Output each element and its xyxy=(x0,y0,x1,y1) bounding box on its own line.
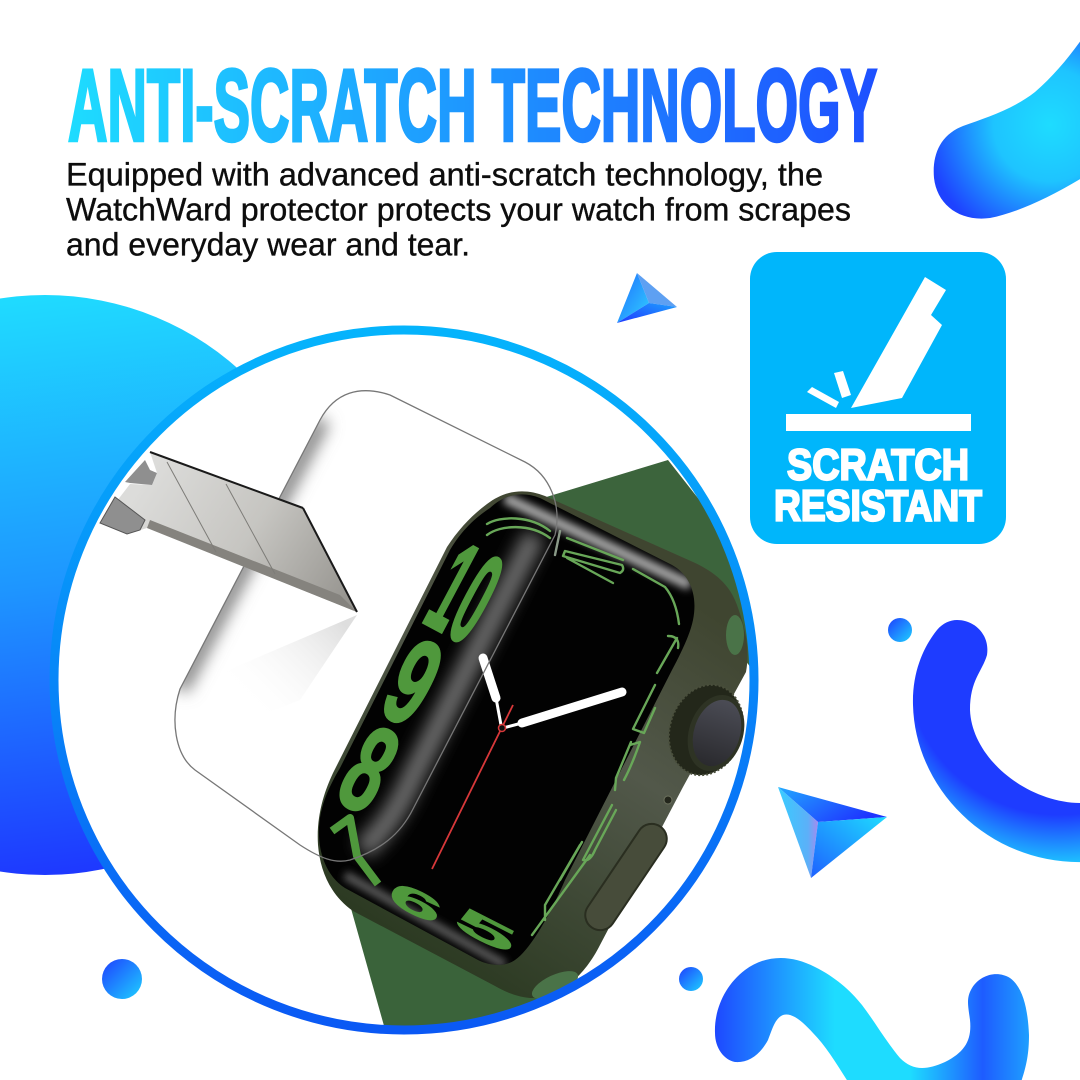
side button xyxy=(584,822,668,931)
badge label xyxy=(774,440,982,530)
strap lug highlights xyxy=(528,615,744,1005)
blade xyxy=(100,452,357,612)
dot bottom middle xyxy=(679,967,703,991)
dial thin markers xyxy=(487,518,679,935)
microphone hole xyxy=(664,796,672,804)
dial numerals 7 6 5: 6 xyxy=(382,873,449,933)
icon: spark marks xyxy=(807,371,851,408)
description text: WatchWard protector protects your watch from scrapes xyxy=(66,192,851,228)
description text: and everyday wear and tear. xyxy=(66,226,470,262)
badge label: RESISTANT xyxy=(774,482,982,530)
badge label: SCRATCH xyxy=(787,440,969,490)
icon: knife blade xyxy=(851,277,946,408)
dial numerals bold xyxy=(340,545,502,812)
screen reflections xyxy=(345,498,690,965)
watch screen xyxy=(319,494,694,965)
blade edges and score lines xyxy=(150,452,357,612)
bottom S-shaped blob xyxy=(715,958,1029,1080)
watch case xyxy=(318,491,748,998)
crown xyxy=(669,684,744,776)
description text xyxy=(66,156,851,262)
utility knife xyxy=(100,452,357,612)
dial numerals bold: 10 xyxy=(406,516,522,672)
large pyramid arrow xyxy=(778,787,887,878)
dial numerals 7 6 5 xyxy=(332,818,523,962)
white disc with product photo xyxy=(58,374,750,1026)
transparent screen protector film xyxy=(175,391,557,861)
left gradient circle xyxy=(0,295,335,875)
dot top right xyxy=(888,618,912,642)
watch strap bottom xyxy=(351,910,538,1026)
watch hands xyxy=(432,658,622,869)
description text: Equipped with advanced anti-scratch technology, the xyxy=(66,156,823,192)
scratch resistant badge xyxy=(750,252,1006,544)
dot bottom left xyxy=(102,959,142,999)
watch strap top xyxy=(546,460,750,666)
knife handle parts xyxy=(100,460,157,534)
blade lower bevel xyxy=(147,520,357,612)
dial numerals bold: 8 xyxy=(319,700,418,840)
icon: scratched surface bar xyxy=(786,414,971,431)
small pyramid arrow xyxy=(617,273,677,323)
top-right blob xyxy=(934,20,1080,219)
dial numerals bold: 9 xyxy=(363,613,462,753)
film reflection under blade xyxy=(278,615,357,682)
blue ring xyxy=(54,330,754,1030)
right C-shaped blob xyxy=(913,620,1080,862)
dial numerals 7 6 5: 5 xyxy=(449,899,523,962)
